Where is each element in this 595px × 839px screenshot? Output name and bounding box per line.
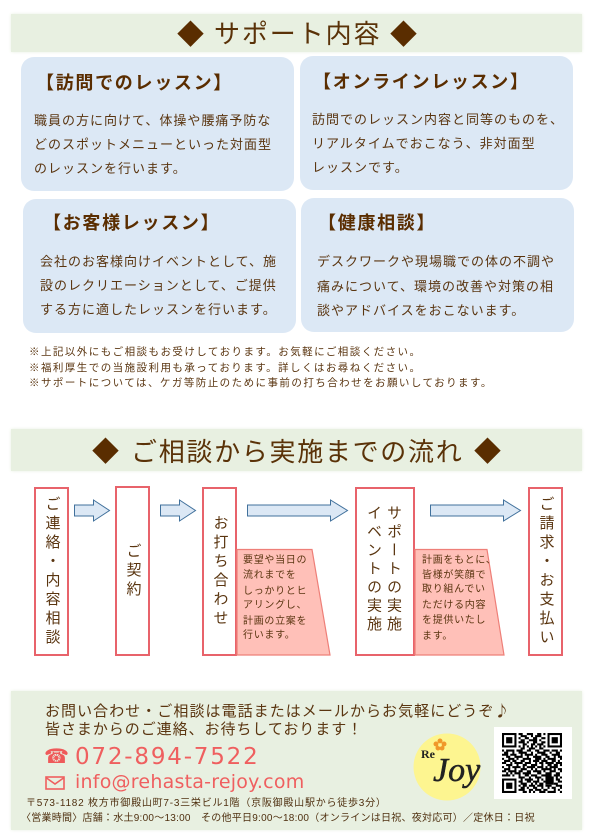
card text: レッスンです。 xyxy=(312,160,409,175)
logo: Re Joy: Re xyxy=(421,747,436,761)
step: billing and payment xyxy=(528,487,563,656)
contact message xyxy=(45,700,510,738)
arrow 3 xyxy=(247,499,348,522)
step: first contact xyxy=(34,487,69,656)
card text: 会社のお客様向けイベントとして、施 xyxy=(40,254,277,269)
contact message: お問い合わせ・ご相談は電話またはメールからお気軽にどうぞ♪ xyxy=(45,700,510,721)
heading band: support contents xyxy=(11,14,582,52)
card text: 設のレクリエーションとして、ご提供 xyxy=(40,278,277,293)
step: billing and payment: ご請求・お支払い xyxy=(538,496,554,648)
logo: Re Joy xyxy=(414,734,481,800)
note: delivery details: 皆様が笑顔で xyxy=(422,570,486,581)
card text: のレッスンを行います。 xyxy=(34,161,187,176)
icon: right diamond: ◆ xyxy=(390,20,417,50)
panel: online lessons xyxy=(300,56,573,190)
panel: health consultation xyxy=(301,198,574,332)
arrow 2 xyxy=(160,499,196,522)
step: meeting xyxy=(202,487,237,656)
arrow 1 xyxy=(74,499,110,522)
note: meeting details: 流れまでを xyxy=(243,570,296,581)
icon: right diamond: ◆ xyxy=(474,437,501,467)
step: support and event: サポートの実施 xyxy=(385,504,402,634)
note: meeting details: 行います。 xyxy=(243,630,296,641)
card heading: 【健康相談】 xyxy=(318,213,436,233)
note: delivery details xyxy=(414,548,505,656)
icon: mail xyxy=(45,776,65,790)
heading text: サポート内容 xyxy=(214,19,381,49)
note: meeting details: アリングし、 xyxy=(243,600,307,611)
flow chart xyxy=(34,486,563,656)
logo: Re Joy: Joy xyxy=(433,752,481,789)
note: meeting details xyxy=(236,548,331,656)
notes text block: ※上記以外にもご相談もお受けしております。お気軽にご相談ください。 xyxy=(29,346,421,358)
note: delivery details: 計画をもとに、 xyxy=(422,555,496,566)
email address: info@rehasta-rejoy.com xyxy=(75,771,304,793)
card text xyxy=(34,113,272,176)
card text xyxy=(312,112,564,175)
notes text block: ※福利厚生での当施設利用も承っております。詳しくはお尋ねください。 xyxy=(29,362,421,374)
panel: customer lessons xyxy=(23,199,296,333)
card heading: 【オンラインレッスン】 xyxy=(313,72,530,92)
QR code xyxy=(494,727,572,799)
card text: 痛みについて、環境の改善や対策の相 xyxy=(317,279,554,294)
card text: する方に適したレッスンを行います。 xyxy=(40,302,277,317)
card heading: 【訪問でのレッスン】 xyxy=(36,73,233,93)
note: delivery details: 取り組んでい xyxy=(422,584,486,595)
note: meeting details: 計画の立案を xyxy=(243,616,307,627)
card text: 談やアドバイスをおこないます。 xyxy=(317,303,525,318)
step: support and event: イベントの実施 xyxy=(365,504,382,634)
card text: リアルタイムでおこなう、非対面型 xyxy=(312,136,536,151)
icon: left diamond: ◆ xyxy=(177,20,204,50)
note: delivery details: ただける内容 xyxy=(422,600,486,611)
card text: 訪問でのレッスン内容と同等のものを、 xyxy=(312,112,564,127)
step: first contact: ご連絡・内容相談 xyxy=(44,496,60,648)
address and hours: 〒573-1182 枚方市御殿山町7-3三栄ビル1階（京阪御殿山駅から徒歩3分） xyxy=(26,798,387,809)
card text: どのスポットメニューといった対面型 xyxy=(34,137,272,152)
panel: visit lessons xyxy=(21,57,294,191)
step: contract xyxy=(115,486,150,656)
contact message: 皆さまからのご連絡、お待ちしております！ xyxy=(45,721,363,738)
phone number: 072-894-7522 xyxy=(75,744,260,770)
notes text block xyxy=(29,346,493,389)
card text xyxy=(40,254,277,317)
notes text block: ※サポートについては、ケガ等防止のために事前の打ち合わせをお願いしております。 xyxy=(29,377,493,389)
step: meeting: お打ち合わせ xyxy=(212,514,228,628)
icon: telephone: ☎ xyxy=(44,744,69,768)
card text: デスクワークや現場職での体の不調や xyxy=(317,254,555,269)
heading text: ご相談から実施までの流れ xyxy=(131,437,463,467)
contact panel xyxy=(11,691,582,830)
address and hours xyxy=(21,797,535,824)
note: delivery details: ます。 xyxy=(422,631,453,642)
note: delivery details: を提供いたし xyxy=(422,615,486,626)
note: meeting details: しっかりとヒ xyxy=(243,586,307,597)
card text xyxy=(317,254,555,318)
icon: left diamond: ◆ xyxy=(92,437,119,467)
address and hours: 〈営業時間〉店舗：水土9:00～13:00 その他平日9:00～18:00（オンラインは日祝、夜対応可）／定休日：日祝 xyxy=(21,813,535,824)
heading band: flow xyxy=(11,429,582,471)
card text: 職員の方に向けて、体操や腰痛予防な xyxy=(34,113,271,128)
step: contract: ご契約 xyxy=(124,542,142,600)
note: meeting details: 要望や当日の xyxy=(243,555,307,566)
card heading: 【お客様レッスン】 xyxy=(43,213,220,233)
step: support and event xyxy=(355,487,415,656)
arrow 4 xyxy=(430,499,522,522)
